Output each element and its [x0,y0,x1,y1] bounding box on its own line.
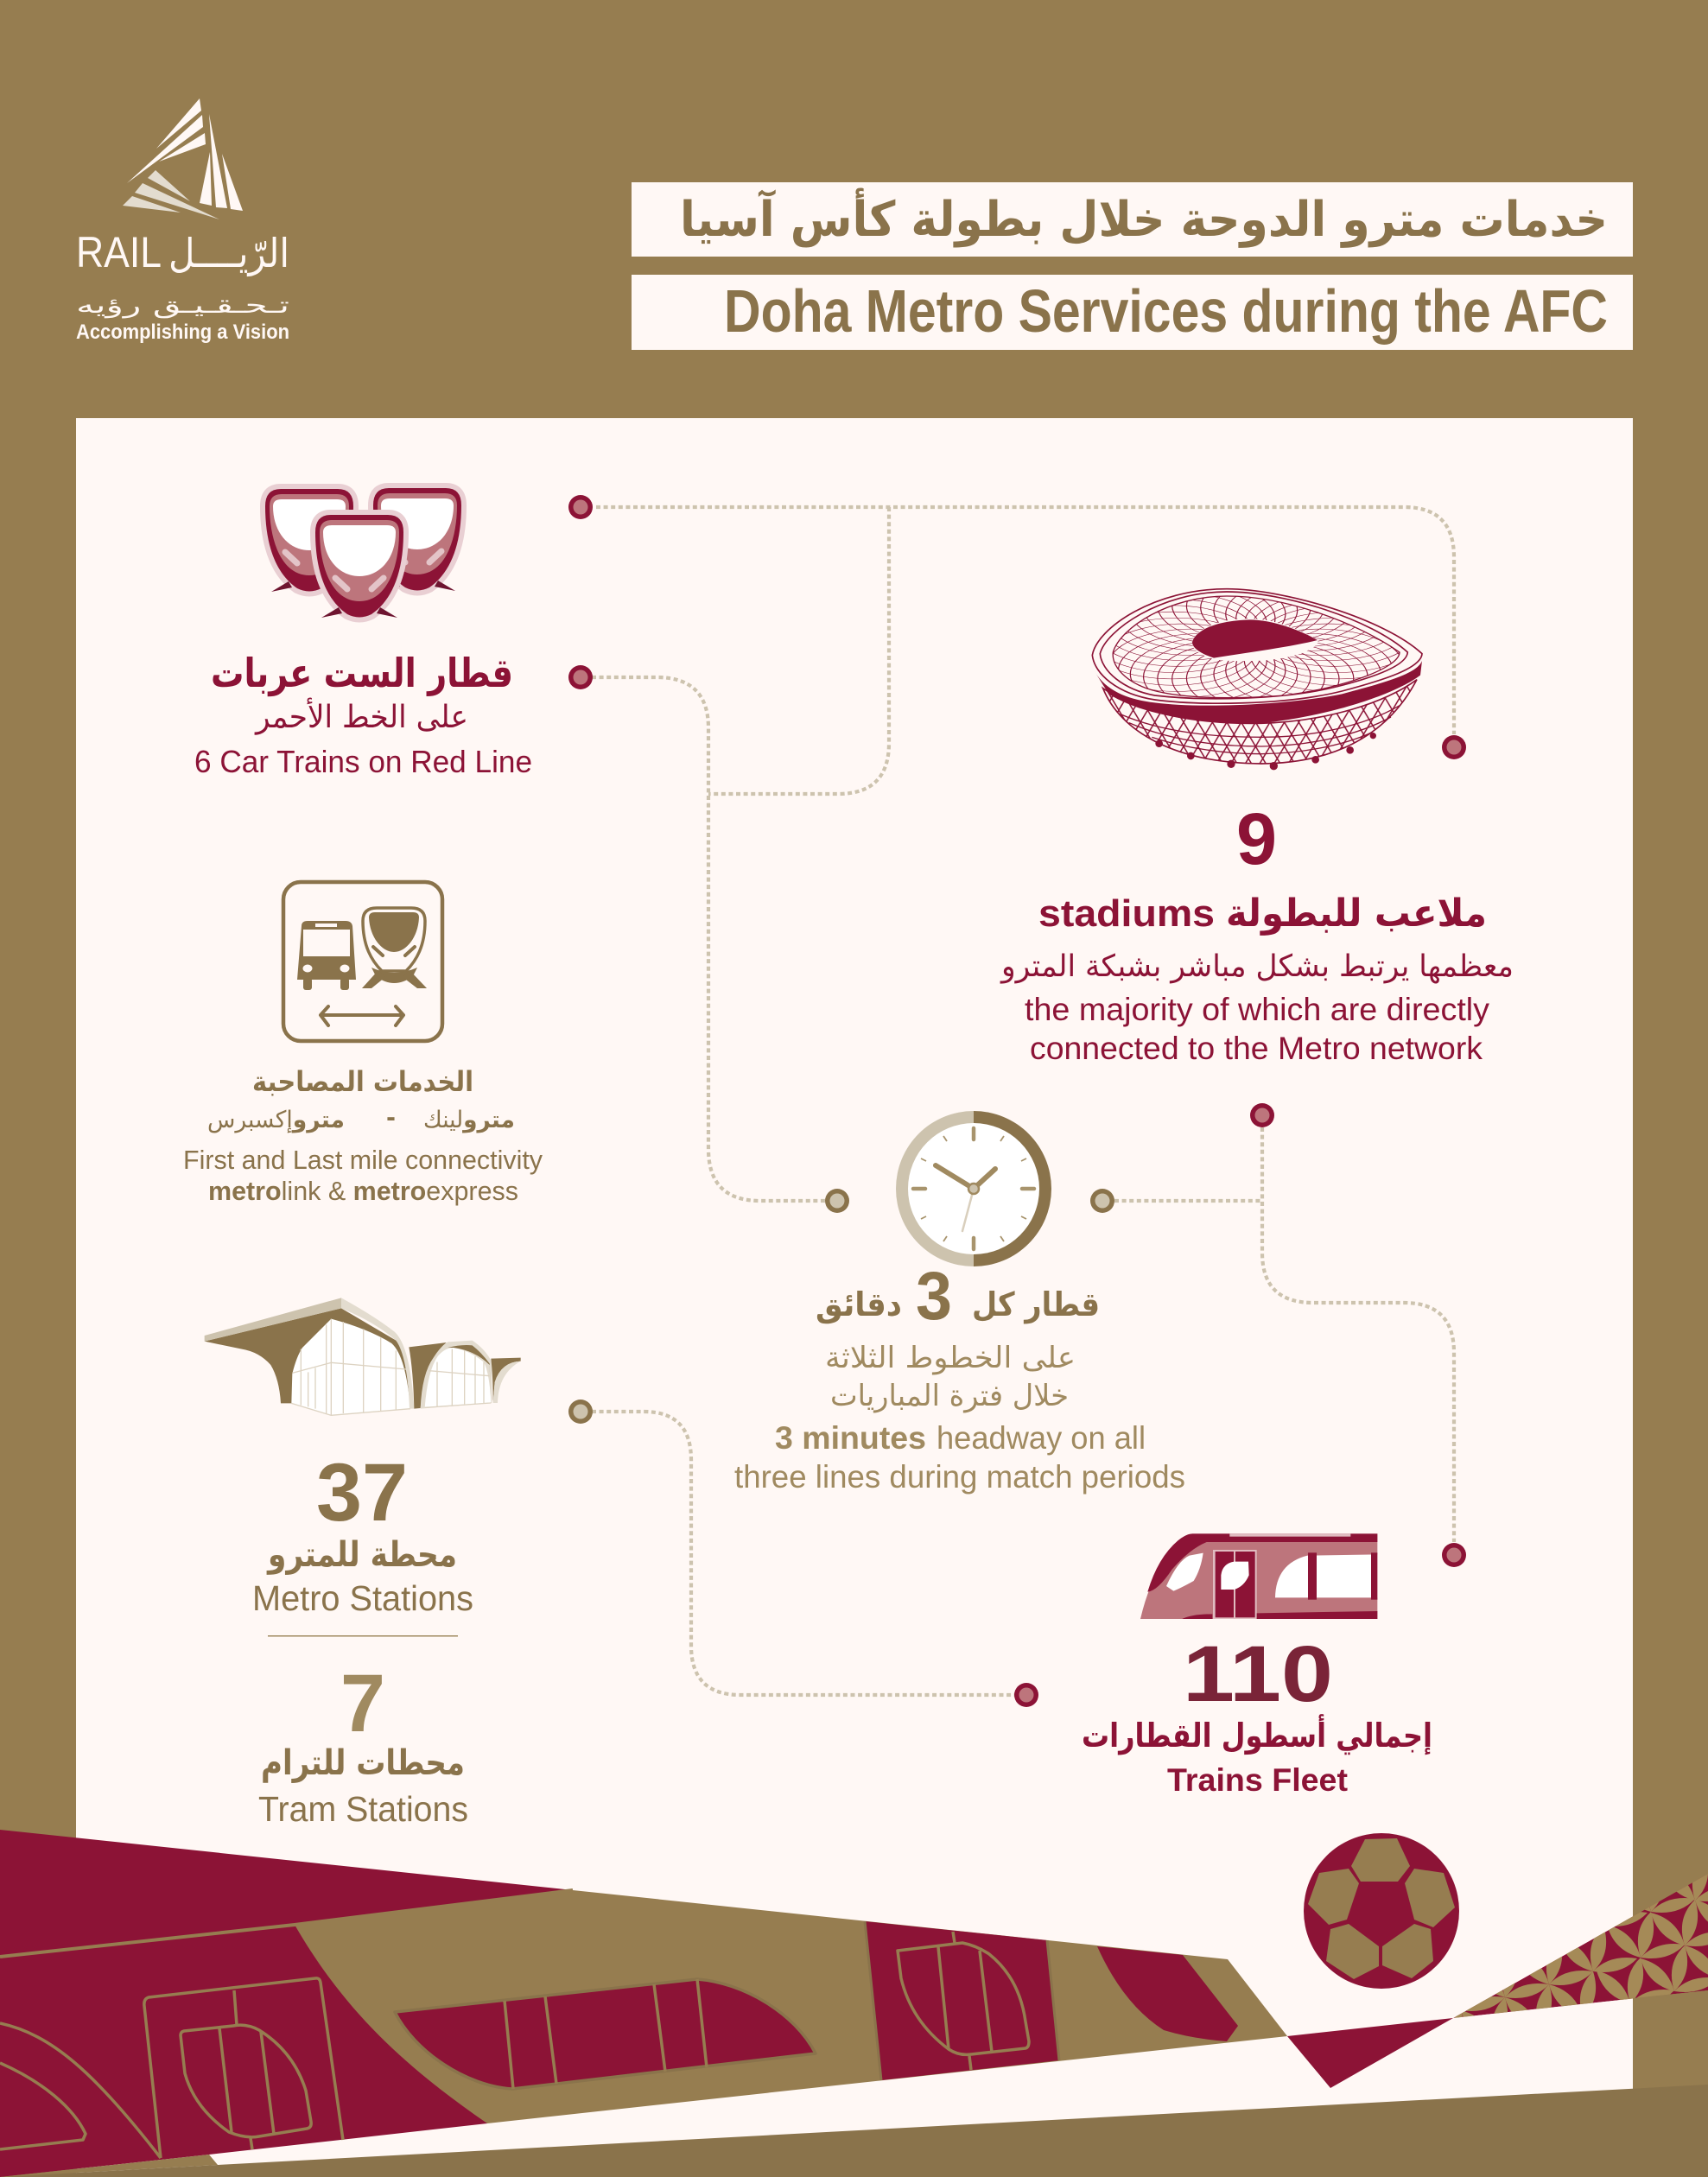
stat: 9 stadiums: stadiums [1038,892,1215,935]
title: arabic [632,182,1633,257]
train [362,908,427,988]
red window right [1097,1946,1238,2041]
text: 3 minutes headway: على الخطوط الثلاثة [825,1341,1076,1375]
text: 3 minutes headway: 3 [916,1257,952,1334]
bottom dark band [0,2085,1708,2177]
main panel [76,418,1633,2177]
icon: three train cabs [265,488,461,618]
text: 3 minutes headway [734,1257,1185,1495]
logo arabic tagline: تـحـقـيـق رؤيه [76,293,289,319]
text: first and last mile: متروإكسبرس [207,1107,345,1133]
logo arabic wordmark: الرّيــــل [168,230,289,277]
text: 3 minutes headway: قطار كل [972,1285,1100,1323]
text: first and last mile: First and Last mile connectivity [183,1145,543,1175]
stat: 9 stadiums: connected to the Metro network [1030,1031,1483,1066]
text: first and last mile: metrolink & metroexpress [208,1176,518,1206]
stat: 110 trains fleet: 110 [1183,1630,1333,1718]
stat: 110 trains fleet: Trains Fleet [1167,1762,1348,1798]
bottom left wedge [0,2155,218,2177]
title: arabic: خدمات مترو الدوحة خلال بطولة كأس آسيا [680,187,1608,248]
text: 3 minutes headway: خلال فترة المباريات [830,1379,1069,1413]
dotted connectors [592,507,1454,1695]
stat: 37 metro stations: 37 [316,1447,408,1539]
icon: football [1304,1833,1459,1989]
red triangle [1287,2018,1453,2088]
stat: 110 trains fleet [1082,1630,1432,1798]
stat: 9 stadiums [1000,798,1514,1066]
stat: 9 stadiums: 9 [1236,798,1277,879]
text: first and last mile: مترولينك [423,1107,515,1133]
logo: Qatar Rail [76,98,289,344]
text: 6 car trains: على الخط الأحمر [254,697,468,735]
text: 6 car trains: 6 Car Trains on Red Line [194,744,532,779]
logo mark [123,98,243,219]
tan train body [295,1890,1287,2123]
logo wordmark: RAIL [76,228,162,276]
stat: 7 tram stations: 7 [340,1658,385,1749]
icon: metro station [205,1298,521,1415]
text: first and last mile: الخدمات المصاحبة [252,1065,473,1098]
stat: 37 metro stations [252,1447,473,1618]
red door [865,1921,1059,2080]
stat: 9 stadiums: the majority of which are directly [1025,992,1490,1027]
text: 3 minutes headway: headway on all [937,1420,1146,1456]
bottom decorative band [0,1809,1708,2177]
stat: 110 trains fleet: إجمالي أسطول القطارات [1082,1714,1432,1755]
icon: stadium [1092,587,1423,771]
stat: 9 stadiums: معظمها يرتبط بشكل مباشر بشبكة المترو [1000,949,1514,984]
text: 6 car trains: قطار الست عربات [211,650,513,696]
patterned triangle [1453,1874,1708,2018]
text: 3 minutes headway: three lines during match periods [734,1459,1185,1495]
stat: 9 stadiums: ملاعب للبطولة [1226,892,1487,936]
icon: clock [896,1111,1051,1266]
text: first and last mile: - [386,1105,396,1132]
red train body [0,1830,573,2177]
icon: bus and train transfer [283,882,442,1041]
text: 6 car trains [194,650,532,779]
logo english tagline: Accomplishing a Vision [76,321,289,344]
icon: side view train [1140,1533,1377,1619]
stat: 37 metro stations: Metro Stations [252,1578,473,1618]
stat: 7 tram stations: محطات للترام [261,1743,465,1783]
stat: 7 tram stations: Tram Stations [258,1789,468,1829]
stat: 37 metro stations: محطة للمترو [266,1535,457,1575]
connector dots [568,495,1466,1707]
left cab outlines [0,1978,343,2158]
stat: 7 tram stations [258,1658,468,1829]
red window [395,1979,816,2089]
text: first and last mile [183,1065,543,1206]
right frame below pattern [1633,1990,1708,2089]
double arrow [321,1006,403,1025]
bus [297,921,356,990]
text: 3 minutes headway: دقائق [816,1285,902,1323]
text: 3 minutes headway: 3 minutes [775,1420,926,1456]
